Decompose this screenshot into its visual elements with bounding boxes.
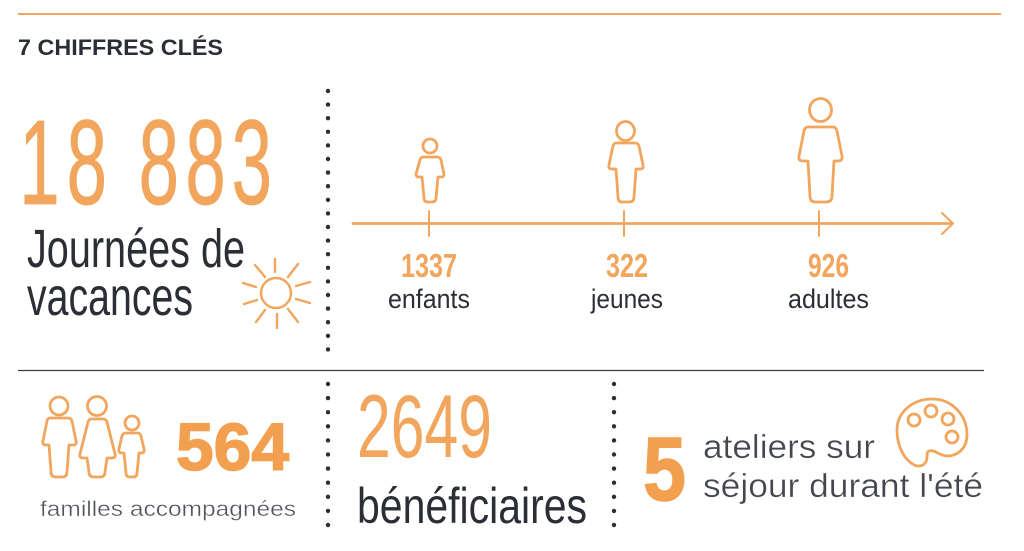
icon: teenager figure	[609, 122, 643, 202]
stat: jeunes: 322	[606, 247, 648, 284]
stat: adultes	[788, 247, 869, 314]
dotted divider: bottom right	[612, 384, 616, 526]
timeline arrow	[353, 211, 953, 236]
icon: family	[43, 396, 144, 477]
panel: familles	[40, 396, 296, 521]
label: Journées de vacances: Journées de	[27, 219, 245, 279]
label: ateliers sur séjour durant l'été: ateliers sur	[703, 428, 875, 465]
panel: ateliers	[643, 399, 983, 520]
label: Journées de vacances	[27, 219, 245, 327]
icon: adult figure	[799, 98, 842, 202]
panel: journées de vacances	[19, 96, 310, 328]
stat: adultes: 926	[808, 247, 849, 284]
dotted divider: bottom left	[326, 384, 330, 526]
label: ateliers sur séjour durant l'été: séjour durant l'été	[703, 467, 983, 504]
panel: age timeline	[353, 98, 953, 314]
stat: enfants: 1337	[401, 247, 457, 284]
stat: enfants	[388, 247, 470, 314]
title: 7 CHIFFRES CLÉS	[18, 35, 223, 60]
label: familles accompagnées: familles accompagnées	[40, 498, 296, 521]
stat: enfants: enfants	[388, 284, 470, 314]
stat: jeunes: jeunes	[590, 284, 663, 314]
label: Journées de vacances: vacances	[27, 267, 193, 327]
number 2649: 2649	[357, 376, 492, 476]
big number 18 883: 18883	[19, 96, 272, 231]
label: ateliers sur séjour durant l'été	[703, 428, 983, 504]
number 564: 564	[176, 410, 289, 485]
icon: sun	[243, 259, 310, 328]
icon: palette	[897, 399, 967, 466]
stat: adultes: adultes	[788, 284, 869, 314]
number 5: 5	[643, 420, 686, 520]
panel: bénéficiaires	[357, 376, 587, 534]
dotted divider: top	[326, 91, 330, 350]
label: bénéficiaires: bénéficiaires	[357, 478, 587, 534]
stat: jeunes	[590, 247, 663, 314]
icon: child figure	[416, 139, 444, 202]
